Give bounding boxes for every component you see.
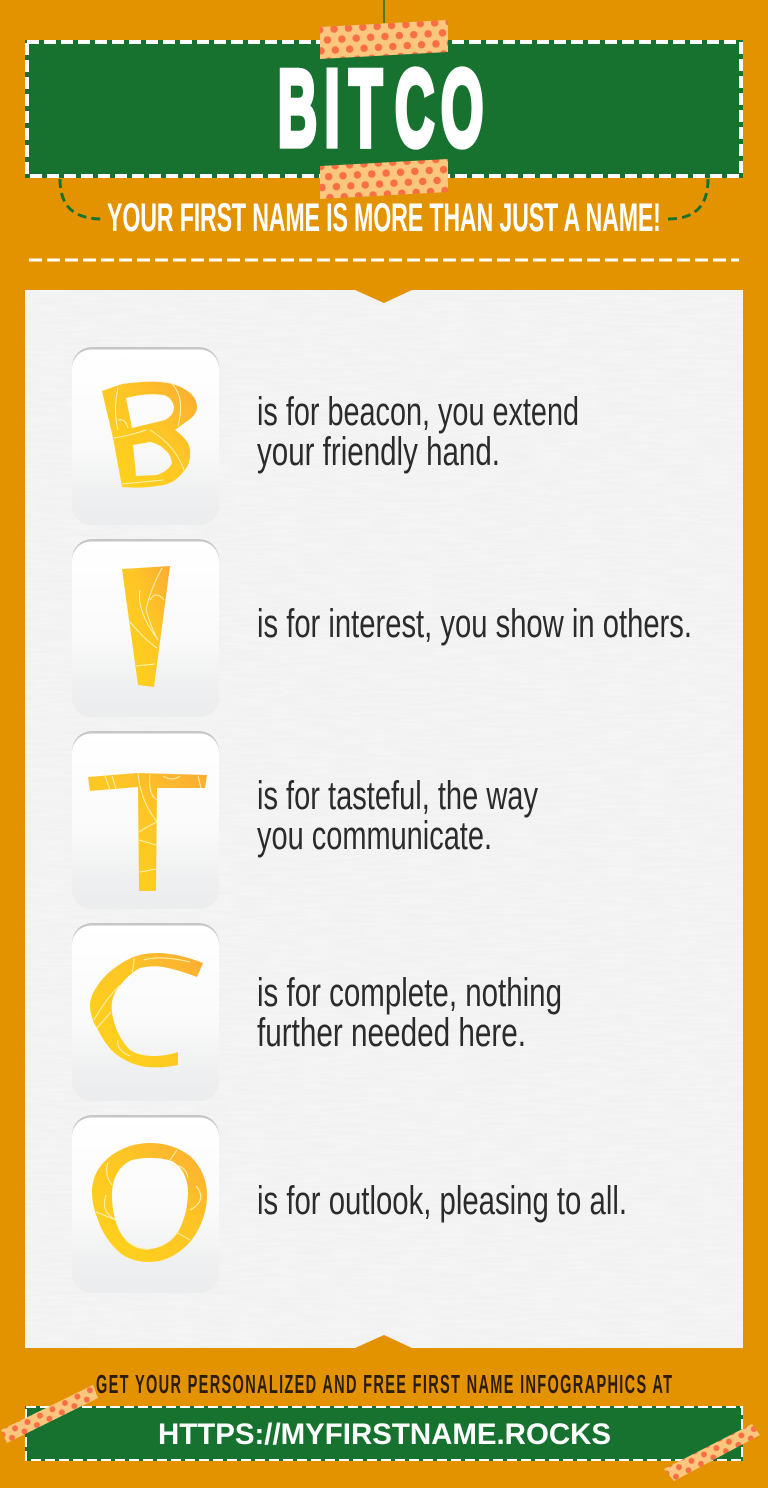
footer url: HTTPS://MYFIRSTNAME.ROCKS (158, 1418, 611, 1451)
dashed divider (29, 258, 739, 262)
title banner (25, 40, 743, 178)
card C (72, 923, 219, 1101)
left footer tape (1, 1385, 98, 1443)
icon: letter T (88, 773, 207, 891)
icon: letter O (92, 1143, 207, 1262)
icon: letter C (90, 953, 203, 1067)
row O (72, 1115, 627, 1293)
text: T line: is for tasteful, the way (257, 774, 538, 818)
icon: letter I (122, 566, 170, 687)
row I (72, 539, 692, 717)
card I (72, 539, 219, 717)
hanging thread (383, 0, 385, 23)
text: C line (257, 971, 562, 1055)
text: B line: your friendly hand. (257, 430, 500, 474)
left connector curve (60, 179, 103, 219)
row C (72, 923, 562, 1101)
text: C line: is for complete, nothing (257, 971, 562, 1015)
text: B line: is for beacon, you extend (257, 390, 579, 434)
footer banner (25, 1406, 743, 1461)
text: O line: is for outlook, pleasing to all. (257, 1179, 627, 1223)
row T (72, 731, 538, 909)
text: T line (257, 774, 538, 858)
card B (72, 347, 219, 525)
text: C line: further needed here. (257, 1011, 526, 1055)
row B (72, 347, 579, 525)
bottom tape (320, 159, 448, 199)
icon: letter B (102, 382, 197, 488)
title: BITCO (278, 48, 483, 170)
right connector curve (668, 179, 708, 219)
card T (72, 731, 219, 909)
text: B line (257, 390, 579, 474)
subtitle: YOUR FIRST NAME IS MORE THAN JUST A NAME! (107, 194, 661, 240)
right footer tape (664, 1424, 760, 1481)
panel: letters (25, 290, 743, 1348)
footer call to action: GET YOUR PERSONALIZED AND FREE FIRST NAME INFOGRAPHICS AT (96, 1371, 672, 1399)
card O (72, 1115, 219, 1293)
top tape (320, 20, 448, 59)
text: T line: you communicate. (257, 814, 492, 858)
